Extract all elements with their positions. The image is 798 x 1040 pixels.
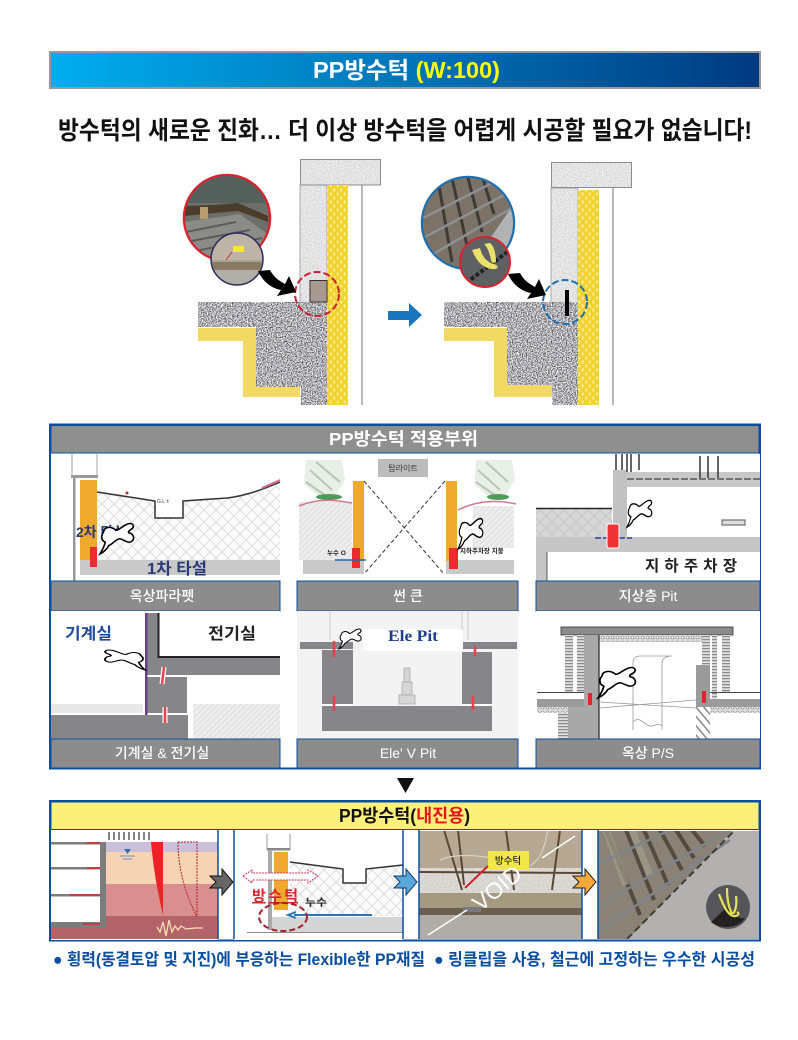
icon: leak bubble (339, 629, 361, 649)
panel: seismic waterstop (50, 801, 760, 940)
dotted double arrow (243, 870, 318, 883)
callout ring: blue dashed (543, 280, 587, 324)
title banner (50, 52, 760, 88)
load arrows (109, 832, 149, 840)
cell label: 옥상파라펫 (130, 588, 194, 604)
cell label (297, 581, 518, 611)
cell label: 썬 큰 (393, 588, 423, 604)
cell: sunken: 누수 O (327, 549, 346, 557)
cell: ground floor pit: 지하주차장 (645, 557, 737, 575)
cell: waterstop section (234, 830, 403, 940)
cell label: 기계실 & 전기실 (115, 745, 209, 761)
cell: machine and electric room: 기계실 (65, 625, 112, 643)
dashed ellipse (259, 903, 307, 931)
down triangle connector (397, 778, 414, 793)
arrow: orange (573, 869, 596, 895)
arrow: before to after (388, 303, 422, 327)
icon: equipment (399, 668, 415, 704)
cell label: 지상층 Pit (619, 588, 678, 604)
photo circle: ring clip (460, 237, 510, 287)
inset: ring clip (706, 885, 750, 929)
cell: rooftop pipe shaft (536, 611, 760, 768)
leak arrow (288, 912, 372, 918)
cell label: Ele' V Pit (380, 745, 436, 761)
cell: rooftop parapet: G.L ± (157, 499, 169, 505)
water level (124, 849, 131, 854)
icon: leak bubble (458, 519, 483, 549)
cell: rebar photo (598, 830, 759, 940)
cell: machine and electric room (51, 611, 280, 768)
seismic wave (157, 920, 203, 936)
cell: elevator pit (297, 611, 518, 768)
PP waterstop bar (565, 290, 569, 316)
cell: ground floor pit (536, 454, 760, 611)
cell: lateral force soil diagram (51, 830, 218, 940)
curved black arrow (258, 270, 296, 296)
callout ring: red dashed (295, 272, 339, 316)
subtitle: 방수턱의 새로운 진화… 더 이상 방수턱을 어렵게 시공할 필요가 없습니다! (58, 117, 752, 145)
panel: application areas (50, 424, 760, 768)
yellow label (488, 851, 529, 870)
cell label (51, 739, 280, 768)
arrow: grey (210, 869, 233, 895)
cell: void photo: VOID (467, 860, 527, 916)
panel heading: PP방수턱(내진용) (339, 806, 470, 826)
icon: tree left (304, 460, 345, 500)
cell: waterstop section: 누수 (305, 897, 327, 909)
cell: rooftop parapet: 1차 타설 (147, 560, 207, 578)
icon: tree right (474, 460, 515, 500)
icon: leak bubble (627, 500, 652, 527)
cell label (297, 739, 518, 768)
chart: earth pressure wedge (151, 842, 163, 915)
icon: leak bubble (105, 650, 145, 670)
panel heading: PP방수턱 적용부위 (329, 429, 478, 449)
cell: sunken (297, 454, 518, 611)
yellow label: 방수턱 (495, 855, 521, 867)
cell label: 옥상 P/S (622, 745, 674, 761)
arrow: blue (394, 869, 417, 895)
cell: machine and electric room: 전기실 (208, 625, 256, 643)
cell: waterstop section: 방수턱 (252, 888, 298, 905)
cell label (536, 581, 760, 611)
title banner: PP방수턱 (W:100) (313, 57, 500, 83)
cell: void photo (419, 830, 582, 940)
label box: Ele Pit (363, 628, 463, 651)
icon: leak bubble (100, 524, 134, 554)
panel heading (51, 802, 759, 830)
cell: sunken: 지하주차장 지붕 (460, 546, 504, 555)
curved black arrow (508, 273, 546, 299)
skylight label (378, 459, 428, 477)
diagram: after, PP waterstop (422, 162, 632, 405)
feature text: ring clip: ● 링클립을 사용, 철근에 고정하는 우수한 시공성 (434, 950, 755, 969)
cell: rooftop parapet: 2차 타설 (76, 524, 126, 540)
panel heading (51, 426, 759, 453)
cell: rooftop parapet (51, 454, 280, 611)
feature text: flexible material: ● 횡력(동결토압 및 지진)에 부응하는 Flexible한 PP재질 (53, 950, 425, 969)
icon: leak bubble (598, 668, 635, 698)
skylight label: 탑라이트 (388, 463, 418, 473)
photo circle: deck formwork (184, 175, 270, 262)
cell label (51, 581, 280, 611)
photo circle: waterstop detail (211, 233, 263, 286)
chart: seismic pressure curve (178, 842, 197, 917)
cell label (536, 739, 760, 768)
pit: concrete upstand (310, 280, 327, 302)
diagram: before, conventional waterstop (184, 160, 380, 405)
label box: Ele Pit: Ele Pit (388, 628, 439, 645)
photo circle: rebar wall (422, 176, 514, 269)
